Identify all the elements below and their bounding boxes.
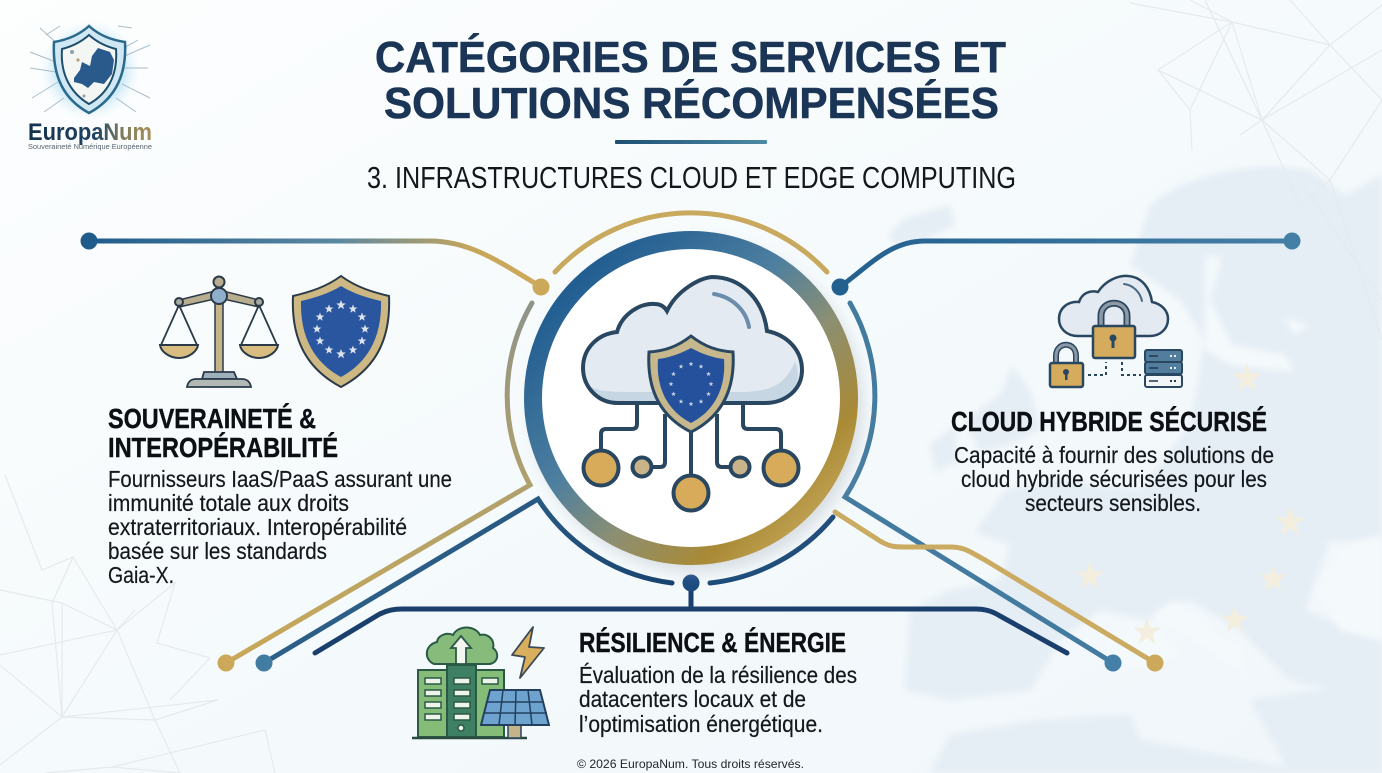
text block: Gaia-X. (108, 562, 174, 588)
text block: extraterritoriaux. Interopérabilité (108, 514, 407, 540)
text block: cloud hybride sécurisées pour les (961, 466, 1267, 492)
icon: EU shield (649, 336, 733, 432)
connector: gold left arc and diagonal (226, 303, 532, 663)
text block: Évaluation de la résilience des (579, 662, 857, 688)
logo wordmark: EuropaNum (28, 119, 152, 146)
connector: blue left arc and diagonal (264, 499, 672, 663)
title (375, 32, 1006, 128)
title: CATÉGORIES DE SERVICES ET (375, 32, 1006, 82)
icon: cloud with locks and server (1050, 276, 1182, 387)
panel: souveraineté et interopérabilité (108, 276, 452, 588)
panel: cloud hybride sécurisé (951, 276, 1274, 516)
title rule (615, 140, 767, 144)
connector: navy bottom bar (315, 574, 1067, 653)
footer copyright: © 2026 EuropaNum. Tous droits réservés. (577, 757, 804, 771)
text block: secteurs sensibles. (1025, 490, 1201, 516)
logo tagline: Souveraineté Numérique Européenne (28, 144, 152, 151)
icon: EU shield (293, 276, 389, 387)
background: network bottom left (0, 475, 275, 773)
text block (579, 662, 857, 737)
connector dot: gold left (218, 654, 234, 672)
title: SOLUTIONS RÉCOMPENSÉES (384, 78, 999, 128)
heading: CLOUD HYBRIDE SÉCURISÉ (951, 406, 1267, 437)
connector: blue right arc and diagonal (845, 303, 1113, 663)
icon: circuit nodes (584, 403, 798, 510)
connector dot: blue right (1104, 654, 1122, 672)
background: Europe map (888, 167, 1382, 773)
panel: résilience et énergie (412, 627, 857, 738)
text block (108, 466, 452, 588)
text block: basée sur les standards (108, 538, 327, 564)
heading: RÉSILIENCE & ÉNERGIE (579, 627, 846, 658)
text block: immunité totale aux droits (108, 490, 349, 516)
text block: l’optimisation énergétique. (579, 711, 823, 737)
text block: datacenters locaux et de (579, 686, 806, 712)
heading: SOUVERAINETÉ & (108, 403, 316, 434)
connector: navy bottom right arc (710, 517, 833, 583)
icon: scales (160, 276, 278, 387)
arc: gold top (555, 213, 827, 272)
text block (954, 442, 1274, 516)
connector: top right (832, 232, 1300, 296)
subtitle: 3. INFRASTRUCTURES CLOUD ET EDGE COMPUTING (367, 160, 1016, 195)
central emblem (531, 240, 863, 572)
background: sea highlights (1100, 255, 1382, 680)
icon: shield with network (30, 20, 150, 120)
background: pale gold stars (1077, 363, 1304, 644)
icon: green datacenter with solar panel (412, 627, 549, 738)
heading (108, 403, 338, 463)
logo: EuropaNum (28, 20, 152, 151)
background: network top right (1130, 0, 1382, 340)
connector dot: blue left (256, 654, 272, 672)
icon: cloud (583, 277, 802, 403)
connector: top left (80, 232, 550, 296)
text block: Fournisseurs IaaS/PaaS assurant une (108, 466, 452, 492)
text block: Capacité à fournir des solutions de (954, 442, 1274, 468)
connector: gold right (835, 512, 1164, 672)
heading: INTEROPÉRABILITÉ (108, 432, 338, 463)
